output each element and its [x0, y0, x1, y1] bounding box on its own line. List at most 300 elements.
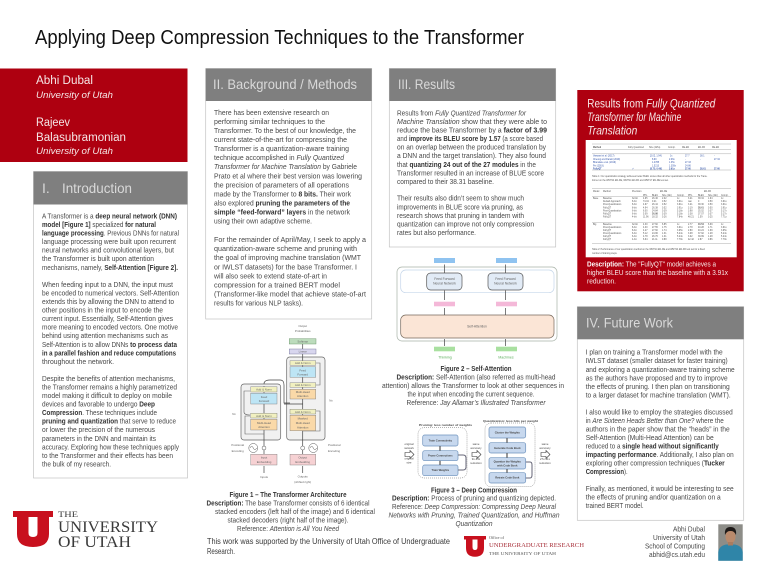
contact details: abhid@cs.utah.edu [649, 552, 705, 559]
panel: authors: University of Utah [36, 146, 113, 157]
text block: introduction: Compression. These techniques include [42, 410, 157, 417]
results tables: Baseline [603, 224, 613, 226]
results tables: 6-bit [632, 209, 637, 212]
caption: figure 1 [206, 492, 375, 533]
results tables: 3.91x [721, 227, 727, 229]
logo: office of undergraduate research: THE UNIVERSITY OF UTAH [489, 551, 556, 556]
logo: University of Utah: UNIVERSITY [58, 519, 158, 536]
text block: introduction: the Transformer is built upon attention [42, 256, 154, 263]
text block: background and methods: Transformer for Machine Translation by Gabriele [214, 164, 357, 171]
description text [587, 262, 729, 285]
text block: future work: trained BERT model. [586, 503, 644, 510]
text block: introduction: extends this by allowing the DNN to attend to [42, 299, 174, 306]
results tables: 1.35x [669, 162, 675, 164]
results tables: 5.18x [677, 210, 683, 212]
caption: figure 1: Reference: Attention is All You Need [237, 526, 340, 533]
text block: results: that quantizing 24 out of the 27 modules in the [397, 162, 536, 169]
heading: introduction: I. [42, 180, 50, 196]
text block: background and methods: For the remainder of April/May, I seek to apply a [214, 237, 366, 244]
results tables: 39.99 [698, 236, 704, 238]
chart: deep compression diagram: original [404, 456, 414, 460]
panel: authors: University of Utah [36, 90, 113, 101]
logo: University of Utah: OF UTAH [58, 534, 131, 551]
caption: figure 2 [382, 366, 564, 407]
text block: background and methods: current state-of-the-art for compressing the [214, 137, 347, 144]
caption: figure 1: stacked encoders (left half of the image) and 6 identical [215, 509, 375, 516]
text block: introduction: current input. Essentially, Self-Attention gives [42, 316, 174, 323]
results tables: 4.78 [643, 236, 648, 238]
results tables: Size (Gb) [662, 195, 672, 197]
results tables: 40.54 [698, 223, 704, 226]
results tables: 4.97 [643, 204, 648, 206]
logo: office of undergraduate research: Office of [489, 535, 505, 540]
text block: introduction: other positions in the input to encode the [42, 308, 163, 315]
results tables: 1.59 [698, 217, 703, 219]
results tables: BLEU [698, 195, 704, 197]
text block: results: research shows that pruning in tandem with [397, 213, 524, 220]
panel: results [389, 68, 556, 247]
panel: background and methods [206, 68, 372, 319]
results tables: 11.96 [643, 217, 649, 219]
results tables: 0.86 [708, 239, 713, 241]
results tables: 5.12 [643, 233, 648, 235]
results tables [586, 140, 737, 257]
results tables: 0.39 [662, 210, 667, 212]
chart: transformer architecture diagram: Output [298, 456, 307, 460]
results tables: 38.30 [698, 204, 704, 206]
results tables: 42.42 [688, 239, 694, 241]
chart: deep compression diagram: Quantization: less bits per weight [483, 419, 538, 423]
chart: transformer architecture diagram: Positional [328, 443, 341, 447]
text block: results: Machine Translation show that they were able to [397, 119, 547, 126]
results tables: 1.74 [662, 230, 667, 232]
text block: background and methods: performing similar techniques to the [214, 119, 325, 126]
results tables: 6.64 [643, 239, 648, 241]
text block: future work [586, 350, 735, 510]
results tables: 8-bit [632, 203, 637, 206]
description text: reduction. [587, 278, 616, 285]
results tables: 24.86 [685, 165, 691, 167]
caption: figure 2: the input when encoding the current sequence. [408, 392, 535, 399]
acknowledgement text: Research. [207, 547, 235, 556]
chart: deep compression diagram: Train Weights [432, 468, 450, 472]
chart: deep compression diagram: Train Connectivity [429, 438, 452, 442]
results tables: 0.50 [708, 207, 713, 209]
results tables: 6-bit [632, 212, 637, 216]
chart: transformer architecture diagram: Inputs [260, 475, 268, 479]
results tables: FullyQT [593, 168, 602, 170]
results tables: 0 [698, 201, 700, 203]
text block: background and methods: will also seek to extend state-of-art in [213, 273, 327, 280]
results tables: [0.75, 0.49] [650, 167, 662, 170]
chart: deep compression diagram: network [404, 446, 414, 450]
text block: background and methods: the goal of improving machine translation (WMT [214, 255, 362, 262]
results tables: 1.71 [708, 227, 713, 229]
text block: future work: the effects of pruning and/or quantization on a [586, 494, 721, 502]
text block: introduction: Self-Attention is to allow DNNs to process data [42, 342, 177, 349]
chart: transformer architecture diagram: Attention [297, 394, 309, 398]
results tables: Fully Quantized [628, 146, 645, 149]
results tables: Post-Quantization [603, 232, 622, 235]
results tables: 3.02 [688, 236, 693, 238]
results tables: 26.44 [652, 204, 658, 206]
text block: introduction: A Transformer is a deep neural network (DNN) [42, 214, 177, 220]
results tables: 27.34 [714, 159, 720, 161]
chart: transformer architecture diagram: Positional [231, 443, 244, 447]
title: Applying Deep Compression Techniques to the Transformer [35, 27, 524, 49]
text block: results [397, 110, 547, 237]
results tables: 0.26 [662, 217, 667, 219]
chart: deep compression diagram: Pruning: less number of weights [419, 423, 472, 427]
text block: background and methods: Transformer. To the best of our knowledge, the [214, 128, 356, 135]
text block: introduction: be encoded to numerical vectors. Self-Attention [42, 290, 179, 298]
text block: introduction: to the Transformer and their effects has been [42, 453, 173, 460]
chart: deep compression diagram: accuracy [470, 446, 482, 450]
results tables: FullyQT [603, 239, 612, 241]
text block: introduction: language processing were built upon recurrent [42, 239, 176, 246]
chart: deep compression diagram: reduction [539, 461, 551, 465]
results tables: 38.34 [698, 198, 704, 200]
contact details: Abhi Dubal [673, 526, 705, 533]
chart: transformer architecture diagram: Forward [297, 372, 308, 376]
results tables: 5.24x [721, 236, 727, 238]
results tables: PPL [643, 195, 648, 197]
results tables: FullyQT [603, 230, 612, 232]
results tables: - [700, 159, 701, 161]
results tables: Vaswani et al. (2017) [593, 154, 615, 158]
text block: future work: reduced to a single head without significantly [586, 444, 719, 450]
text block: results: Results from Fully Quantized Transformer for [397, 110, 527, 118]
results tables: 5.17x [721, 214, 727, 216]
text block: introduction: the bulk of my research. [42, 461, 111, 468]
results tables: 3.91x [677, 207, 683, 209]
chart: deep compression diagram: 27x-31x [540, 457, 551, 461]
heading: results from paper: Results from Fully Quantized [587, 99, 716, 111]
results tables: 0.37 [708, 210, 713, 212]
panel: authors [0, 68, 188, 162]
results tables: 1x [677, 198, 680, 200]
results tables: 3.91x [669, 168, 675, 170]
chart: deep compression diagram: Quantize the Weights [494, 460, 521, 464]
text block: future work: Self-Attention (Multi-Head Attention) can be [586, 435, 714, 442]
chart: self-attention diagram: Neural Network [433, 282, 456, 286]
results tables: 5.09 [643, 214, 648, 216]
chart: self-attention diagram: Feed Forward [434, 277, 455, 281]
results tables: EN-DE [660, 191, 668, 193]
text block: background and methods: Prato et al where their best version was lowering [214, 173, 362, 180]
chart: transformer architecture diagram: Multi-Head [296, 421, 310, 425]
contact details [645, 526, 705, 559]
heading: background and methods: II. Background / Methods [213, 76, 357, 92]
results tables: 3.98 [688, 210, 693, 212]
text block: background and methods: results for various NLP tasks). [214, 301, 303, 308]
text block: introduction: parameters in the DNN and maintain its [42, 436, 157, 443]
logo: University of Utah: THE [58, 509, 78, 519]
logo: office of undergraduate research [464, 535, 584, 557]
text block: background and methods: or IWLST datasets) for the base Transformer. I [214, 264, 357, 271]
text block: results: reduce the base Transformer by a factor of 3.99 [397, 128, 547, 135]
chart: deep compression diagram: with Code Book [496, 464, 518, 468]
chart: transformer architecture diagram: Multi-Head [296, 390, 310, 394]
results tables: 7.71x [721, 217, 727, 219]
results tables: 0.21 [652, 201, 657, 203]
text block: results: Their results also didn’t seem to show much [397, 196, 524, 203]
results tables: 0.37 [708, 214, 713, 216]
chart: transformer architecture diagram: Encoding [328, 449, 340, 453]
results tables: 26.38 [652, 207, 658, 209]
panel: introduction [34, 172, 188, 478]
caption: figure 2: Description: Self-Attention (also referred as multi-head [396, 374, 556, 382]
chart: transformer architecture diagram: Add & Norm [295, 410, 311, 414]
acknowledgement text: This work was supported by the University of Utah Office of Undergraduate [207, 537, 451, 546]
results tables: Size (Gb) [708, 195, 718, 197]
text block: results: compared to their 38.31 baseline. [397, 179, 494, 186]
text block: background and methods: quantization-aware scheme and pruning with [214, 246, 357, 253]
chart: transformer architecture diagram: Probabilities [295, 329, 311, 333]
text block: introduction: Despite the benefits of attention mechanisms, [42, 376, 175, 383]
caption: figure 2: attention) allows the Transformer to look at other sequences in [382, 383, 564, 390]
results tables: FullyQT [603, 214, 612, 216]
results tables: Base [593, 198, 599, 200]
chart: transformer architecture diagram: Outputs [298, 474, 308, 478]
chart: deep compression diagram: Cluster the Weights [495, 430, 520, 434]
results tables: 1.31 [662, 233, 667, 235]
caption: figure 2: Figure 2 – Self-Attention [440, 366, 512, 373]
contact details: School of Computing [645, 544, 705, 551]
results tables: 38.61 [698, 207, 704, 209]
chart: deep compression diagram: 9x-13x [472, 457, 481, 461]
description text: higher BLEU score than the baseline with a 3.91x [587, 270, 729, 277]
results tables: 35.02 [698, 210, 704, 212]
panel: results from Fully Quantized Transformer [577, 90, 744, 291]
acknowledgement text [207, 537, 451, 556]
text block: background and methods: There has been extensive research on [214, 110, 329, 117]
results tables: 4-bit [632, 238, 637, 241]
results tables: Baseline [603, 198, 613, 200]
results tables: 1.69 [708, 230, 713, 232]
text block: background and methods: using their own adaptive scheme. [214, 218, 312, 225]
chart: transformer architecture diagram [231, 324, 341, 484]
results tables: 4.30 [643, 227, 648, 229]
results tables: 8.90 [652, 159, 657, 161]
results tables: 4.95 [643, 198, 648, 200]
results tables: 3.38 [688, 214, 693, 216]
chart: transformer architecture diagram: Encoding [232, 449, 244, 453]
text block: introduction: mechanisms, namely, Self-Attention [Figure 2]. [42, 265, 178, 272]
results tables: 8-bit [632, 226, 637, 229]
chart: transformer architecture diagram: (shifted right) [294, 480, 311, 484]
results tables: 1.28 [708, 236, 713, 238]
results tables: DE-EN [712, 147, 719, 149]
results tables: Compr. [677, 194, 685, 197]
results tables: FullyQT [603, 236, 612, 238]
results tables: 1.4788 [652, 162, 660, 164]
caption: figure 3 [388, 488, 560, 528]
panel: authors: Rajeev [36, 117, 70, 129]
text block: future work: Finally, as mentioned, it would be interesting to see [586, 486, 734, 493]
text block: introduction: throughout the network. [42, 359, 114, 366]
text block: future work: IWLST dataset (smaller dataset for faster training) [586, 358, 728, 365]
results tables: Model [593, 191, 600, 193]
results tables: Table 1: Our quantization strategy achieves better BLEU scores than all other quantization methods for the Trans- [592, 175, 708, 178]
results tables: 1.5213 [652, 165, 660, 167]
text block: background and methods: made by the Transformer to 8 bits. Their work [214, 191, 352, 198]
results tables: 6.00 [643, 210, 648, 212]
results tables: nan [688, 201, 693, 203]
results tables: 3.21 [688, 204, 693, 206]
results tables: 48.21 [688, 217, 694, 219]
text block: background and methods: (Transformer-like model that achieve state-of-art [214, 292, 366, 299]
chart: deep compression diagram: original [404, 442, 414, 446]
panel: authors: Abhi Dubal [36, 75, 93, 87]
chart: transformer architecture diagram: Feed [299, 368, 306, 372]
results tables: Compr. [668, 146, 676, 149]
chart: transformer architecture diagram: Embedding [257, 460, 272, 464]
caption: figure 2: Reference: Jay Allamar’s Illustrated Transformer [406, 400, 546, 407]
text block: future work: and exploring a quantization-aware training scheme [586, 367, 735, 374]
text block: introduction: pruning and quantization that serve to reduce [42, 419, 176, 426]
results tables: 27.60 [714, 168, 720, 170]
caption: figure 3: Networks with Pruning, Trained Quantization, and Huffman [388, 513, 560, 520]
results tables: 2.06x [669, 159, 675, 161]
results tables: 21.11 [652, 239, 658, 241]
results tables: 32-bit [632, 197, 638, 200]
results tables: 0.52 [662, 204, 667, 206]
text block: future work: Compression). [586, 469, 628, 476]
chart: deep compression diagram: reduction [470, 461, 482, 465]
results tables: 3.91x [721, 204, 727, 206]
caption: figure 3: Figure 3 – Deep Compression [431, 488, 517, 494]
results tables: 27.55 [652, 227, 658, 229]
chart: transformer architecture diagram: Forward [259, 399, 270, 403]
results tables: 7.79x [677, 239, 683, 241]
results tables: 0.52 [662, 207, 667, 209]
text block: introduction: neural networks and convolutional layers, but [42, 248, 174, 255]
caption: figure 1: stacked decoders (right half of the image). [228, 518, 349, 524]
results tables: 3.91x [721, 201, 727, 203]
results tables: number of training steps. [592, 252, 618, 255]
heading: introduction: Introduction [62, 180, 132, 196]
results tables: 0.25 [708, 217, 713, 219]
results tables: PPL [688, 195, 693, 197]
results tables: 5.18x [677, 214, 683, 216]
results tables: ✓ [632, 167, 634, 170]
chart: transformer architecture diagram: Nx [329, 398, 333, 402]
results tables: 40.24 [698, 230, 704, 232]
results tables: Post-Quantization [603, 209, 622, 212]
text block: results: and improve its BLEU score by 1.57 (a score based [397, 136, 543, 143]
results tables: 26.98 [652, 214, 658, 216]
text block: results: on an overlap between the produced translation by [397, 145, 547, 152]
results tables: 3.91x [677, 204, 683, 206]
results tables: 1.359x [669, 165, 677, 167]
chart: transformer architecture diagram: Attention [297, 426, 309, 430]
results tables: 1x [677, 224, 680, 226]
chart: transformer architecture diagram: Linear [299, 350, 307, 354]
text block: future work: in Are Sixteen Heads Better than One? where the [586, 418, 724, 425]
text block: background and methods: simple “feed-forward” layers in the network [214, 209, 351, 216]
results tables: 7.79x [721, 239, 727, 241]
chart: deep compression diagram: same [473, 442, 480, 446]
text block: results: a DNN and the target translation). They also found [397, 153, 546, 160]
results tables: 3.21 [688, 198, 693, 200]
results tables: 38.61 [700, 168, 706, 170]
chart: transformer architecture diagram: Softmax [297, 340, 309, 344]
results tables: 0.39 [662, 214, 667, 216]
text block: introduction: model making it difficult to deploy on mobile [42, 393, 172, 400]
results tables: 2.80 [688, 230, 693, 232]
chart: self-attention diagram: Machines [498, 356, 514, 360]
results tables: Precision [632, 190, 642, 193]
results tables: 37.92 [698, 233, 704, 235]
results tables: Size (GPa) [649, 147, 660, 149]
chart: transformer architecture diagram: Add & Norm [295, 383, 311, 387]
results tables: Compr. [721, 194, 729, 197]
results tables: 5.24x [677, 233, 683, 235]
chart: transformer architecture diagram: Add & Norm [256, 388, 272, 392]
text block: introduction: accuracy. Exploring how these techniques apply [42, 444, 180, 451]
results tables: EN-FR [704, 191, 711, 193]
chart: transformer architecture diagram: Nx [232, 412, 236, 416]
heading: future work: IV. Future Work [586, 315, 674, 331]
results tables: 5.24x [721, 233, 727, 235]
chart: transformer architecture diagram: Feed [261, 395, 268, 399]
chart: deep compression diagram: accuracy [539, 446, 551, 450]
results tables: 74.04 [643, 201, 649, 203]
results tables: 4.27 [643, 230, 648, 232]
chart: transformer architecture diagram: Add & Norm [295, 361, 311, 365]
results tables: 3.91x [677, 227, 683, 229]
results tables: Method [593, 146, 602, 149]
results tables: 0.50 [708, 204, 713, 206]
text block: introduction: devices and favorable to undergo Deep [42, 402, 155, 409]
results tables: 2.02 [662, 198, 667, 200]
results tables: 3.95x [721, 230, 727, 232]
text block: introduction: model [Figure 1] specialized for natural [42, 222, 156, 229]
chart: transformer architecture diagram: Add & Norm [256, 414, 272, 418]
results tables: 26.76 [652, 236, 658, 238]
results tables: Table 2: Performance of our quantization method on the WMT14 EN-DE and WMT14 EN-FR test set for a fixed [592, 248, 705, 251]
results tables: [2.02, 1.94] [650, 156, 662, 158]
results tables: 3.95x [677, 230, 683, 232]
heading: results: III. Results [398, 76, 455, 92]
results tables: former on the WMT14 EN-DE, WMT14 EN-FR and WMT17 EN-DE test set. [592, 179, 669, 182]
results tables: 8-bit [632, 206, 637, 209]
text block: future work: impacting performance. Additionally, I also plan on [586, 452, 734, 459]
text block: results: quantization can improve not only compression [397, 222, 534, 228]
caption: figure 3: Description: Process of pruning and quantizing depicted. [392, 496, 556, 503]
heading: results from paper [587, 99, 716, 137]
results tables: BLEU [652, 195, 658, 197]
chart: deep compression diagram: Retrain Code Book [495, 476, 520, 480]
text block: future work: as the authors have proposed and try to improve [586, 375, 728, 382]
results tables: 24.84 [652, 210, 658, 212]
results tables: 3.91x [721, 207, 727, 209]
results tables: 5.17x [721, 210, 727, 212]
results tables: 5.24x [677, 236, 683, 238]
chart: transformer architecture diagram: Embedding [295, 460, 310, 464]
chart: transformer architecture diagram: Multi-Head [257, 421, 271, 425]
text block: introduction: the Transformer remains a highly parametrized [42, 384, 177, 392]
results tables: 4.94 [643, 207, 648, 209]
results tables: 4-bit [632, 216, 637, 219]
results tables: 2.78 [688, 227, 693, 229]
text block: future work: the effects of pruning. I then plan on transitioning [586, 384, 730, 391]
results tables: EN-FR [698, 147, 705, 149]
chart: self-attention diagram: Neural Network [494, 282, 517, 286]
chart: deep compression diagram: Generate Code Book [494, 446, 521, 450]
results tables: - [685, 159, 686, 161]
